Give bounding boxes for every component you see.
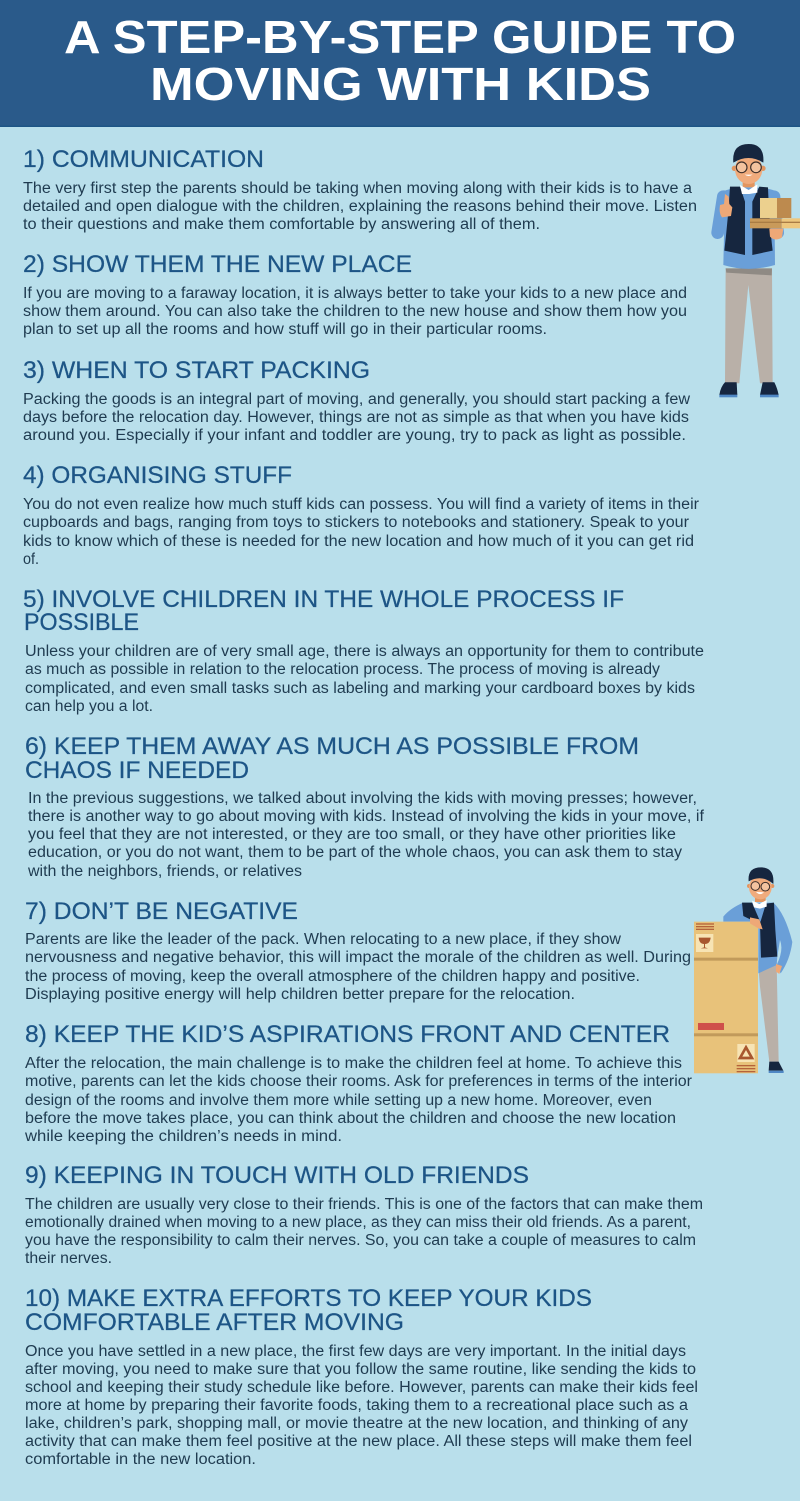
- text block: step 2: plan to set up all the rooms and how stuff will go in their particular rooms.: [23, 321, 547, 338]
- text block: step 9: you have the responsibility to calm their nerves. So, you can take a couple of measures to calm: [25, 1232, 696, 1249]
- panel: step 6 keep them away from chaos: [25, 733, 705, 880]
- title banner: A STEP-BY-STEP GUIDE TO: [64, 11, 736, 63]
- text block: step 5: Unless your children are of very small age, there is always an opportunity for them to contribute: [25, 643, 704, 660]
- text block: step 5: as much as possible in relation to the relocation process. The process of moving is already: [25, 661, 660, 678]
- text block: step 3: [23, 391, 691, 444]
- text block: step 4: cupboards and bags, ranging from toys to stickers to notebooks and stationery. Speak to your: [23, 514, 689, 531]
- heading: step 6: CHAOS IF NEEDED: [25, 757, 249, 784]
- text block: step 8: [24, 1055, 692, 1145]
- text block: step 7: the process of moving, keep the overall atmosphere of the children happy and positive.: [25, 968, 640, 985]
- title banner: [0, 0, 800, 127]
- text block: step 6: there is another way to go about moving with kids. Instead of involving the kids in your move, if: [28, 808, 705, 825]
- text block: step 4: of.: [23, 551, 39, 568]
- text block: step 5: complicated, and even small tasks such as labeling and marking your cardboard boxes by kids: [25, 680, 695, 697]
- heading: step 9: 9) KEEPING IN TOUCH WITH OLD FRIENDS: [25, 1162, 529, 1189]
- text block: step 4: You do not even realize how much stuff kids can possess. You will find a variety of items in their: [23, 496, 699, 513]
- text block: step 8: design of the rooms and involve them more while setting up a new home. Moreover, even: [25, 1092, 652, 1109]
- text block: step 7: nervousness and negative behavior, this will impact the morale of the children as well. During: [25, 949, 691, 966]
- text block: step 6: education, or you do not want, them to be part of the whole chaos, you can ask them to stay: [28, 844, 682, 861]
- text block: step 9: The children are usually very close to their friends. This is one of the factors that can make them: [25, 1196, 703, 1213]
- panel: step 1 communication: [23, 146, 697, 233]
- text block: step 8: before the move takes place, you can think about the children and choose the new location: [25, 1110, 676, 1127]
- text block: step 4: kids to know which of these is needed for the new location and how much of it you can get rid: [23, 533, 694, 550]
- text block: step 9: [25, 1196, 703, 1267]
- panel: step 10 extra efforts: [25, 1285, 698, 1468]
- panel: step 7 don't be negative: [25, 898, 691, 1003]
- heading: step 1: 1) COMMUNICATION: [23, 146, 264, 173]
- heading: step 7: 7) DON’T BE NEGATIVE: [25, 898, 298, 925]
- panel: step 8 kid's aspirations: [24, 1021, 692, 1145]
- text block: step 5: [25, 643, 704, 715]
- text block: step 10: comfortable in the new location.: [25, 1451, 256, 1468]
- heading: step 6: 6) KEEP THEM AWAY AS MUCH AS POSSIBLE FROM: [25, 733, 639, 760]
- text block: step 10: after moving, you need to make sure that you follow the same routine, like sending the kids to: [25, 1361, 696, 1378]
- text block: step 10: more at home by preparing their favorite foods, taking them to a recreational place such as a: [25, 1397, 688, 1414]
- heading: step 4: 4) ORGANISING STUFF: [23, 462, 292, 489]
- panel: step 2 show them the new place: [23, 251, 687, 338]
- text block: step 3: around you. Especially if your infant and toddler are young, try to pack as light as possible.: [23, 427, 686, 444]
- text block: step 9: emotionally drained when moving to a new place, as they can miss their old friends. As a parent,: [25, 1214, 691, 1231]
- heading: step 5: POSSIBLE: [24, 609, 139, 636]
- panel: step 5 involve children: [23, 586, 704, 715]
- text block: step 8: After the relocation, the main challenge is to make the children feel at home. To achieve this: [25, 1055, 682, 1072]
- panel: step 3 when to start packing: [23, 357, 691, 444]
- text block: step 6: you feel that they are not interested, or they are too small, or they have other priorities like: [28, 826, 676, 843]
- text block: step 10: school and keeping their study schedule like before. However, parents can make their kids feel: [25, 1379, 698, 1396]
- text block: step 7: Parents are like the leader of the pack. When relocating to a new place, if they show: [25, 931, 622, 948]
- text block: step 1: [23, 180, 697, 233]
- text block: step 7: Displaying positive energy will help children better prepare for the relocation.: [25, 986, 575, 1003]
- heading: step 5: [23, 586, 624, 636]
- heading: step 2: 2) SHOW THEM THE NEW PLACE: [23, 251, 412, 278]
- heading: step 5: 5) INVOLVE CHILDREN IN THE WHOLE PROCESS IF: [23, 586, 624, 613]
- heading: step 6: [25, 733, 639, 784]
- text block: step 1: to their questions and make them comfortable by answering all of them.: [23, 216, 540, 233]
- heading: step 8: 8) KEEP THE KID’S ASPIRATIONS FRONT AND CENTER: [25, 1021, 670, 1048]
- text block: step 3: days before the relocation day. However, things are not as simple as that when you have kids: [23, 409, 689, 426]
- heading: step 10: [25, 1285, 592, 1336]
- text block: step 10: [25, 1343, 698, 1468]
- text block: step 2: show them around. You can also take the children to the new house and show them how you: [23, 303, 687, 320]
- text block: step 2: [23, 285, 687, 338]
- heading: step 3: 3) WHEN TO START PACKING: [23, 357, 370, 384]
- panel: step 9 old friends: [25, 1162, 703, 1267]
- text block: step 8: while keeping the children’s needs in mind.: [24, 1128, 342, 1145]
- text block: step 10: lake, children’s park, shopping mall, or movie theatre at the new location, and thinking of any: [25, 1415, 688, 1432]
- text block: step 2: If you are moving to a faraway location, it is always better to take your kids to a new place and: [23, 285, 687, 302]
- text block: step 6: In the previous suggestions, we talked about involving the kids with moving presses; however,: [28, 790, 697, 807]
- text block: step 6: [27, 790, 705, 880]
- text block: step 10: Once you have settled in a new place, the first few days are very important. In the initial days: [25, 1343, 686, 1360]
- text block: step 4: [23, 496, 699, 568]
- text block: step 8: motive, parents can let the kids choose their rooms. Ask for preferences in terms of the interior: [25, 1073, 692, 1090]
- text block: step 7: [25, 931, 691, 1003]
- text block: step 6: with the neighbors, friends, or relatives: [27, 863, 302, 880]
- icon: mover holding boxes with thumbs up: [718, 144, 800, 397]
- text block: step 9: their nerves.: [25, 1250, 112, 1267]
- title banner: MOVING WITH KIDS: [150, 58, 651, 110]
- heading: step 10: COMFORTABLE AFTER MOVING: [25, 1309, 404, 1336]
- text block: step 1: The very first step the parents should be taking when moving along with their kids is to have a: [23, 180, 692, 197]
- text block: step 10: activity that can make them feel positive at the new place. All these steps will make them feel: [25, 1433, 692, 1450]
- text block: step 3: Packing the goods is an integral part of moving, and generally, you should start packing a few: [23, 391, 691, 408]
- icon: mover leaning on tall cardboard box: [694, 867, 792, 1073]
- panel: step 4 organising stuff: [23, 462, 699, 568]
- text block: step 1: detailed and open dialogue with the children, explaining the reasons behind their move. Listen: [23, 198, 697, 215]
- heading: step 10: 10) MAKE EXTRA EFFORTS TO KEEP YOUR KIDS: [25, 1285, 592, 1312]
- text block: step 5: can help you a lot.: [25, 698, 153, 715]
